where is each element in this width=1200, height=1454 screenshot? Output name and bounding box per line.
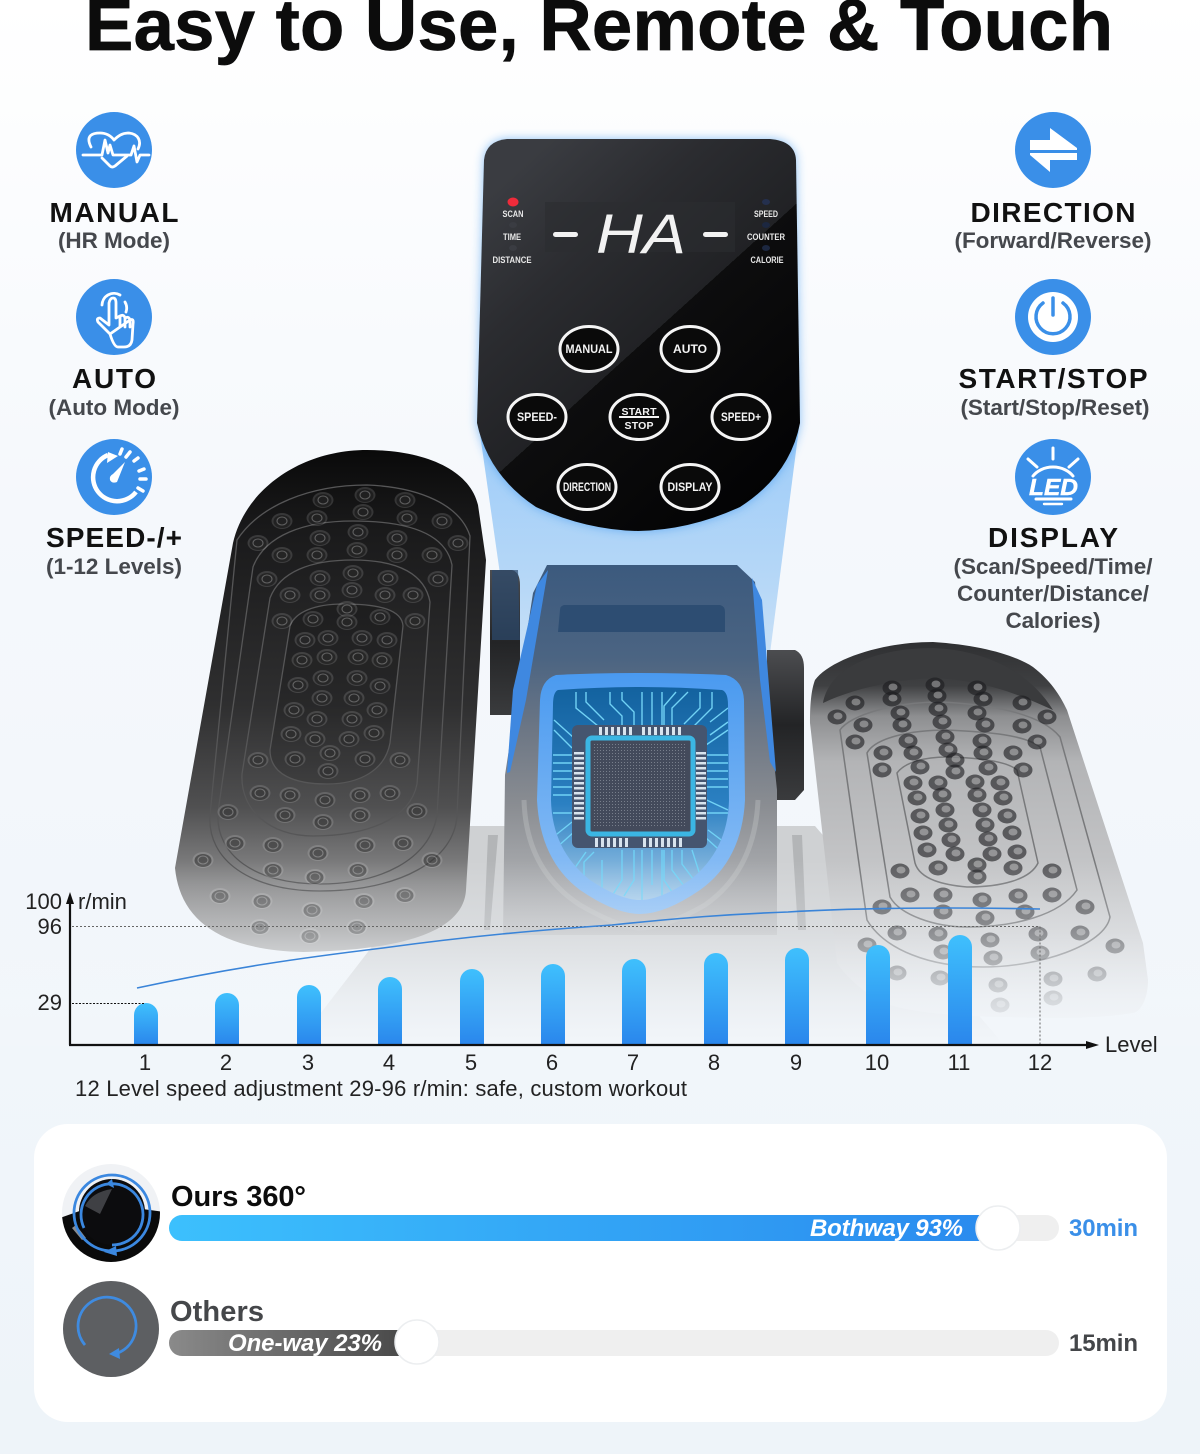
chip window (551, 687, 729, 900)
x axis labels: 9 (790, 1050, 802, 1075)
button: display: DISPLAY (668, 480, 712, 494)
chip window frame (537, 673, 745, 914)
indicator labels (492, 209, 785, 265)
right pedal body (810, 642, 1148, 1018)
floor base behind pedals (300, 826, 1000, 1040)
support column (478, 420, 800, 700)
right feature: start stop (958, 279, 1150, 420)
left feature: manual (50, 112, 178, 253)
subtext: display modes: Calories) (1006, 608, 1100, 633)
LED readout: HA (596, 202, 686, 265)
LED readout (553, 202, 728, 265)
icon: one-way wheel (63, 1281, 159, 1377)
row: others (63, 1281, 1138, 1377)
chip core (588, 738, 693, 834)
track (169, 1215, 1059, 1241)
button: speed minus (508, 394, 566, 440)
button: display (661, 464, 719, 510)
centre unit (503, 565, 777, 935)
chip core grid (594, 744, 687, 828)
x axis labels: 10 (865, 1050, 889, 1075)
subtext: levels: (1-12 Levels) (46, 554, 182, 579)
indicator labels: CALORIE (750, 255, 784, 265)
hinges (490, 570, 804, 800)
fill bar (169, 1330, 419, 1356)
blue side strip left (507, 570, 548, 773)
heading: direction: DIRECTION (970, 197, 1136, 228)
panel glow (477, 139, 800, 531)
axes (66, 892, 1099, 1049)
panel: comparison card (34, 1124, 1167, 1422)
button: manual: MANUAL (566, 342, 612, 356)
x axis labels: 4 (383, 1050, 395, 1075)
x axis labels: 6 (546, 1050, 558, 1075)
track (169, 1330, 1059, 1356)
product fade (0, 860, 1200, 1046)
product illustration: mini stepper (175, 139, 1148, 1040)
right pedal (810, 642, 1148, 1018)
slot (558, 605, 725, 632)
slider knob (976, 1206, 1020, 1250)
reference lines (72, 926, 1040, 1045)
icon: speed gauge (76, 439, 152, 515)
subtext: hr mode: (HR Mode) (58, 228, 170, 253)
left feature: auto (48, 279, 180, 420)
indicator labels: DISTANCE (492, 255, 532, 265)
chip pins (574, 727, 706, 847)
heading: auto: AUTO (72, 363, 156, 394)
card background (34, 1124, 1167, 1422)
x axis labels: 12 (1028, 1050, 1052, 1075)
button: speed plus (712, 394, 770, 440)
bar text: Bothway 93% (810, 1215, 963, 1242)
x axis labels: 2 (220, 1050, 232, 1075)
left pedal body (175, 450, 486, 952)
button: auto: AUTO (673, 342, 707, 356)
subtext: display modes: (Scan/Speed/Time/ (954, 554, 1153, 579)
subtext: forward reverse: (Forward/Reverse) (954, 228, 1152, 253)
icon: touch hand (76, 279, 152, 355)
button: speed plus: SPEED+ (721, 410, 761, 424)
indicator labels: COUNTER (747, 232, 785, 242)
bars (134, 935, 972, 1045)
button: direction (558, 464, 616, 510)
y axis labels (25, 889, 127, 1015)
label: ours: Ours 360° (171, 1181, 306, 1213)
x axis labels: 5 (465, 1050, 477, 1075)
right pedal grooves (840, 702, 1110, 967)
y axis labels: 96 (38, 914, 62, 939)
button: manual (560, 326, 618, 372)
button: start stop: STOP (624, 420, 654, 432)
button: start stop (610, 394, 668, 440)
row: ours 360 (60, 1164, 1138, 1270)
heading: display: DISPLAY (988, 522, 1118, 553)
x axis labels: Level (1105, 1032, 1158, 1057)
speed chart (25, 889, 1158, 1075)
heading: speed: SPEED-/+ (46, 522, 182, 553)
right feature: display (954, 439, 1153, 633)
right massage dots (828, 678, 1124, 1012)
blue side strip right (752, 578, 776, 772)
icon: led (1015, 439, 1091, 515)
subtext: auto mode: (Auto Mode) (48, 395, 180, 420)
button: speed minus: SPEED- (517, 410, 557, 424)
subtext: display modes (954, 554, 1153, 633)
left pedal (175, 450, 486, 952)
right pedal top rim shade (823, 648, 1053, 710)
heading: manual: MANUAL (50, 197, 178, 228)
buttons (508, 326, 770, 510)
subtext: display modes: Counter/Distance/ (957, 581, 1150, 606)
x axis labels: 8 (708, 1050, 720, 1075)
icon: power (1015, 279, 1091, 355)
icon: arrows (1015, 112, 1091, 188)
x axis labels: 1 (139, 1050, 151, 1075)
y axis labels: 29 (38, 990, 62, 1015)
left feature: speed (46, 439, 182, 579)
lower bevel (524, 800, 758, 928)
slider knob (395, 1320, 439, 1364)
fill bar (169, 1215, 999, 1241)
value: 15min (1069, 1330, 1138, 1357)
unit body (503, 565, 777, 935)
control panel (477, 139, 800, 531)
bar text: One-way 23% (228, 1330, 382, 1357)
indicator labels: SCAN (502, 209, 524, 219)
button: direction: DIRECTION (563, 480, 611, 494)
panel face (477, 139, 800, 531)
button: start stop: START (622, 406, 657, 418)
display window (545, 202, 735, 252)
y axis labels: r/min (78, 889, 127, 914)
heading: start stop: START/STOP (958, 363, 1148, 394)
icon: led: LED (1029, 474, 1078, 500)
left pedal grooves (210, 485, 470, 891)
indicator lights (508, 198, 770, 251)
subtext: start stop reset: (Start/Stop/Reset) (960, 395, 1150, 420)
icon: heart rate (76, 112, 152, 188)
left massage dots (192, 487, 468, 944)
x axis labels: 11 (948, 1050, 970, 1075)
chip plate (572, 725, 707, 848)
x axis labels (139, 1032, 1158, 1075)
circuit traces (552, 692, 728, 900)
chart caption: 12 Level speed adjustment 29-96 r/min: safe, custom workout (75, 1076, 687, 1101)
value: 30min (1069, 1215, 1138, 1242)
x axis labels: 3 (302, 1050, 314, 1075)
indicator labels: SPEED (754, 209, 778, 219)
label: others: Others (170, 1296, 264, 1328)
y axis labels: 100 (25, 889, 62, 914)
trend curve (137, 908, 1040, 988)
button: auto (661, 326, 719, 372)
right feature: direction (954, 112, 1152, 253)
x axis labels: 7 (627, 1050, 639, 1075)
indicator labels: TIME (503, 232, 521, 242)
icon: 360 wheel (62, 1164, 160, 1262)
